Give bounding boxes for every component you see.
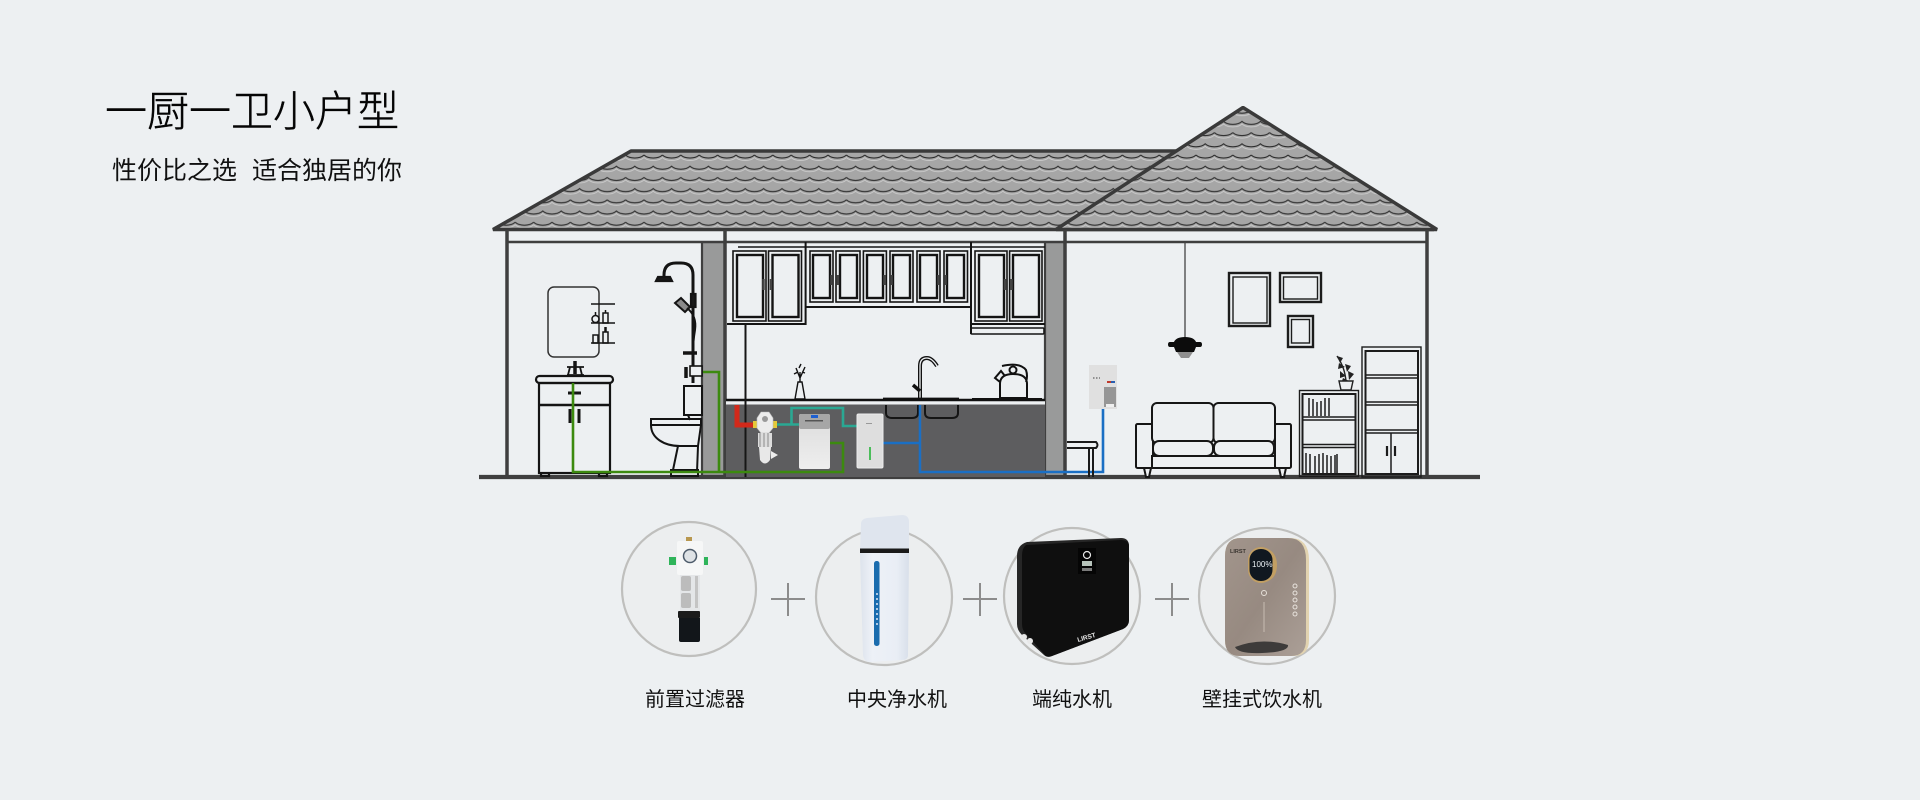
subtitle: 性价比之选 适合独居的你	[112, 157, 402, 185]
house structure: walls, ceiling, floor	[479, 230, 1480, 477]
pipe: green	[573, 372, 843, 472]
roof: gable	[1056, 108, 1437, 230]
kitchen counter base	[726, 324, 1045, 477]
roof: main	[493, 151, 1434, 230]
bathroom shelves	[591, 304, 615, 343]
dispenser unit: LIRST	[1230, 549, 1247, 555]
side table	[1067, 442, 1098, 477]
tall bookshelf	[1362, 347, 1421, 477]
circle	[1004, 528, 1140, 664]
plus sign	[963, 583, 997, 616]
sink	[883, 398, 959, 418]
pipe: blue	[883, 405, 1103, 472]
low bookshelf	[1300, 390, 1358, 476]
mini device: RO purifier	[857, 414, 883, 468]
dispenser unit	[1225, 538, 1309, 656]
circle	[816, 529, 952, 665]
toilet	[651, 386, 702, 476]
kitchen cabinets	[727, 242, 1045, 334]
circle	[1199, 528, 1335, 664]
title: 一厨一卫小户型	[105, 88, 399, 135]
plus sign	[1155, 583, 1189, 616]
product: wall dispenser	[1199, 528, 1335, 664]
mini device: softener	[799, 414, 830, 469]
purifier unit	[860, 515, 909, 662]
mini device: pre-filter	[753, 412, 778, 464]
mirror	[548, 287, 599, 357]
label: central purifier: 中央净水机	[847, 688, 947, 711]
label: pre-filter: 前置过滤器	[645, 688, 745, 711]
dispenser unit: 100%	[1252, 560, 1272, 569]
label: RO purifier: 端纯水机	[1032, 688, 1112, 711]
kitchen counter items	[794, 358, 1042, 418]
mini device: wall dispenser	[1089, 365, 1117, 409]
house illustration	[479, 108, 1480, 477]
product: RO purifier	[1004, 528, 1140, 664]
picture frames	[1229, 273, 1321, 347]
pendant lamp	[1168, 242, 1202, 358]
vanity cabinet	[536, 376, 613, 476]
water pipes	[573, 372, 1103, 472]
shower	[656, 263, 702, 383]
sofa	[1136, 403, 1291, 477]
plus sign	[771, 583, 805, 616]
filter unit	[669, 537, 708, 642]
sink faucet	[567, 361, 584, 375]
circle	[622, 522, 756, 656]
pipe: red inlet	[737, 405, 755, 425]
potted plant	[1337, 356, 1354, 390]
pipe: brown behind blue	[920, 405, 922, 472]
bathroom	[536, 263, 702, 476]
product: central purifier	[816, 515, 952, 665]
faucet handle	[913, 385, 920, 391]
black purifier unit: LIRST	[1077, 632, 1097, 644]
label: wall dispenser: 壁挂式饮水机	[1202, 688, 1322, 711]
pipe: teal	[775, 408, 857, 426]
faucet	[920, 358, 937, 399]
vase	[794, 364, 805, 399]
kettle	[972, 365, 1042, 399]
product: pre-filter	[622, 522, 756, 656]
